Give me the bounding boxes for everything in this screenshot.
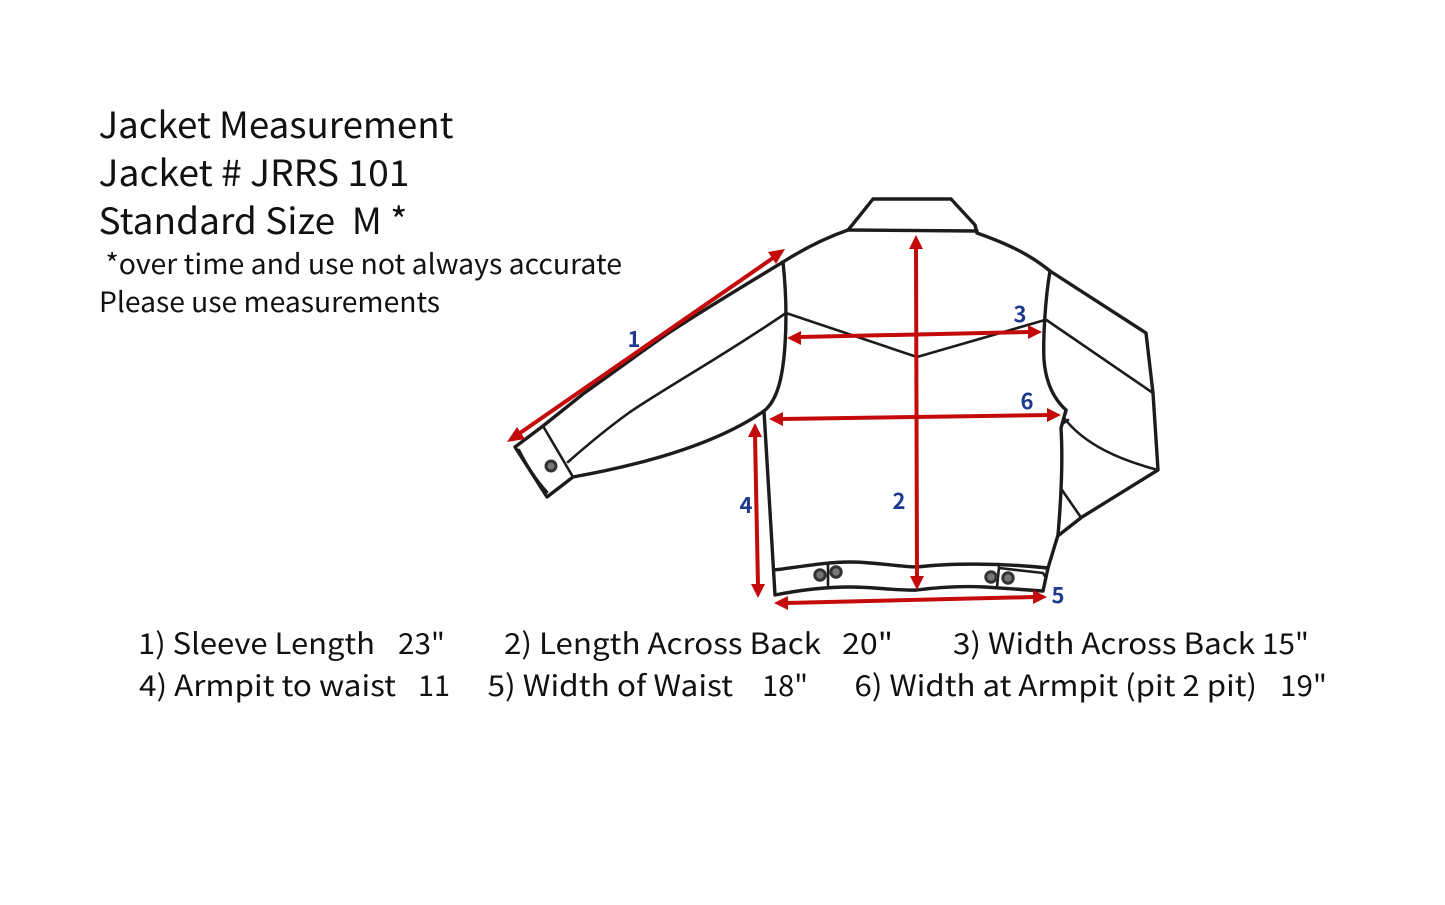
measurement 6: 19" bbox=[1280, 663, 1327, 705]
measurement arrows bbox=[507, 235, 1061, 610]
number 5: 5 bbox=[1052, 578, 1064, 610]
measurement 3: 15" bbox=[1262, 621, 1309, 663]
standard size: Standard Size M * bbox=[98, 193, 408, 245]
waistband bbox=[774, 562, 1048, 570]
arrow number labels bbox=[628, 297, 1064, 610]
number 3: 3 bbox=[1014, 297, 1026, 329]
arrow 2: length across back bbox=[909, 235, 924, 590]
measurement 4: 4) Armpit to waist bbox=[139, 663, 396, 705]
number 4: 4 bbox=[740, 488, 753, 520]
jacket collar bbox=[848, 199, 977, 233]
number 6: 6 bbox=[1021, 384, 1034, 416]
right sleeve seams bbox=[1045, 319, 1158, 516]
back yoke seam bbox=[786, 313, 1045, 357]
left sleeve bbox=[515, 262, 786, 497]
accuracy note: *over time and use not always accurate bbox=[106, 243, 622, 283]
measurement 5: 5) Width of Waist bbox=[488, 663, 733, 705]
left sleeve seams and cuff bbox=[519, 313, 786, 492]
jacket illustration bbox=[515, 199, 1158, 595]
measurement 1: 1) Sleeve Length bbox=[138, 621, 375, 663]
measurement 2: 2) Length Across Back bbox=[504, 621, 821, 663]
buttons bbox=[546, 461, 1013, 583]
measurement 1: 23" bbox=[398, 621, 445, 663]
measurements list bbox=[138, 621, 1327, 705]
measurement 3: 3) Width Across Back bbox=[953, 621, 1255, 663]
right sleeve bbox=[1044, 271, 1158, 535]
waistband tabs bbox=[828, 564, 1046, 587]
instruction note: Please use measurements bbox=[99, 281, 440, 321]
jacket number: Jacket # JRRS 101 bbox=[98, 145, 410, 197]
measurement 2: 20" bbox=[842, 621, 893, 663]
arrow 1: sleeve length bbox=[507, 249, 785, 442]
arrow 4: armpit to waist bbox=[748, 423, 765, 598]
arrow 5: width of waist bbox=[774, 590, 1047, 610]
heading block bbox=[98, 97, 622, 321]
number 1: 1 bbox=[628, 322, 640, 354]
arrow 6: width at armpit bbox=[769, 408, 1061, 426]
measurement 4: 11 bbox=[418, 663, 450, 705]
measurement 6: 6) Width at Armpit (pit 2 pit) bbox=[854, 663, 1257, 705]
number 2: 2 bbox=[893, 484, 905, 516]
measurement 5: 18" bbox=[762, 663, 808, 705]
title: Jacket Measurement bbox=[98, 97, 454, 149]
jacket body outline bbox=[764, 230, 1066, 595]
arrow 3: width across back bbox=[787, 325, 1042, 345]
